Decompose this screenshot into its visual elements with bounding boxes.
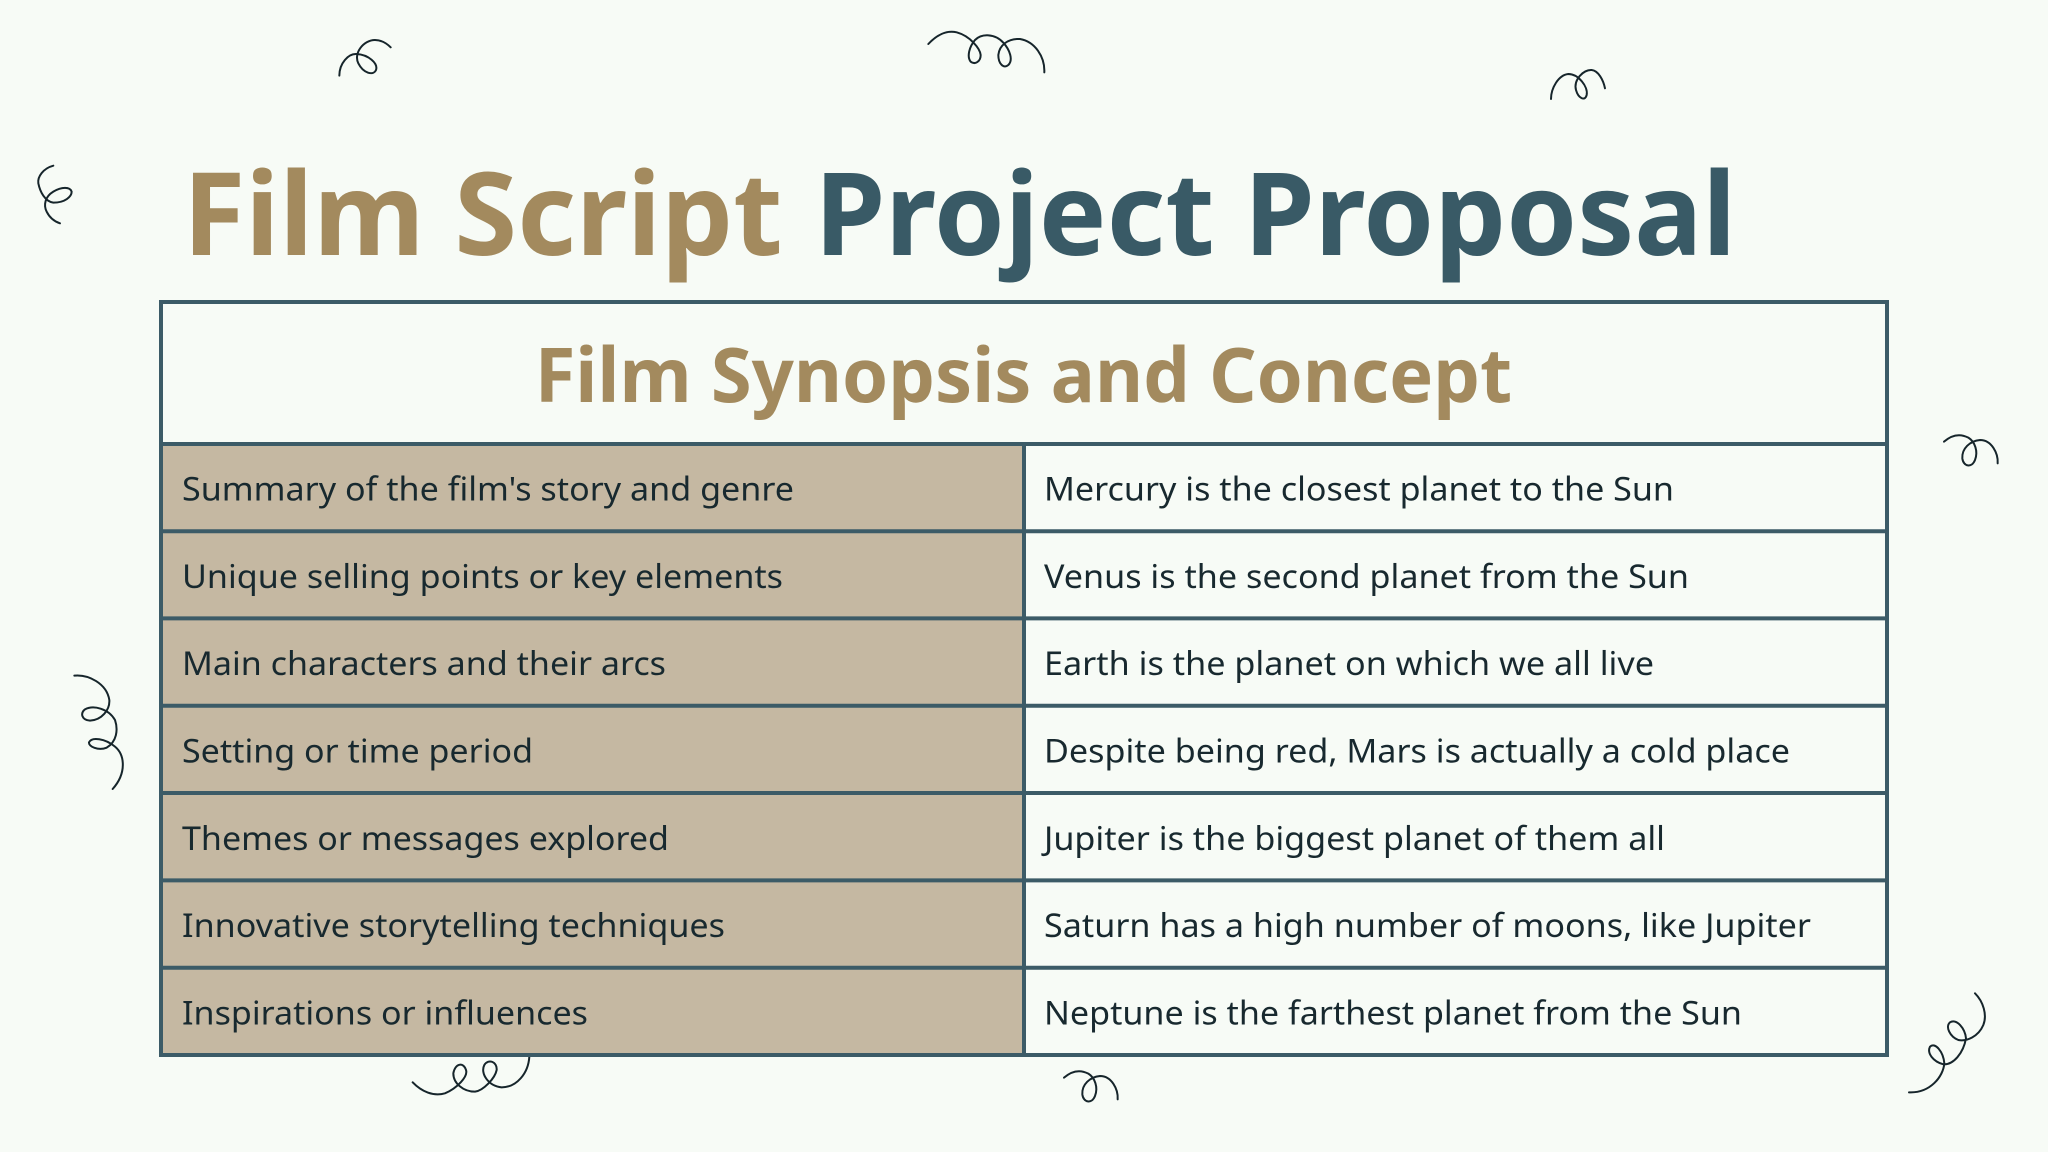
icon: squiggle bottom left: [413, 1057, 529, 1094]
icon: squiggle top left: [339, 40, 391, 76]
row 1: [182, 466, 1674, 511]
title: Project Proposal: [815, 132, 1736, 289]
icon: squiggle bottom centre: [1064, 1071, 1118, 1101]
table grid lines: [161, 302, 1887, 1055]
row 3: Main characters and their arcs: [182, 640, 666, 685]
row 6: Saturn has a high number of moons, like Jupiter: [1044, 902, 1811, 947]
icon: squiggle left lower: [74, 676, 123, 789]
icon: squiggle bottom right: [1909, 993, 1985, 1092]
title: [183, 132, 1736, 289]
icon: squiggle top centre: [928, 32, 1044, 72]
row 7: [182, 990, 1742, 1035]
title: Film Script: [183, 132, 783, 289]
row 7: Neptune is the farthest planet from the Sun: [1044, 990, 1742, 1035]
icon: squiggle left upper: [38, 166, 72, 223]
row 6: Innovative storytelling techniques: [182, 902, 725, 947]
row 7: Inspirations or influences: [182, 990, 588, 1035]
table heading: Film Synopsis and Concept: [535, 322, 1512, 424]
row 3: [182, 640, 1654, 685]
row 5: Themes or messages explored: [182, 815, 669, 860]
row 2: [182, 553, 1689, 598]
row 4: Setting or time period: [182, 727, 533, 772]
icon: squiggle right: [1944, 435, 1998, 465]
table background and fills: [161, 302, 1887, 1055]
row 5: [182, 815, 1665, 860]
row 2: Venus is the second planet from the Sun: [1044, 553, 1689, 598]
row 1: Summary of the film's story and genre: [182, 466, 794, 511]
row 4: Despite being red, Mars is actually a cold place: [1044, 727, 1790, 772]
row 2: Unique selling points or key elements: [182, 553, 783, 598]
row 5: Jupiter is the biggest planet of them all: [1041, 815, 1665, 860]
row 6: [182, 902, 1811, 947]
row 1: Mercury is the closest planet to the Sun: [1044, 466, 1674, 511]
panel: synopsis table: [161, 302, 1887, 1055]
row 3: Earth is the planet on which we all live: [1044, 640, 1654, 685]
row 4: [182, 727, 1790, 772]
icon: squiggle top right: [1551, 70, 1605, 99]
